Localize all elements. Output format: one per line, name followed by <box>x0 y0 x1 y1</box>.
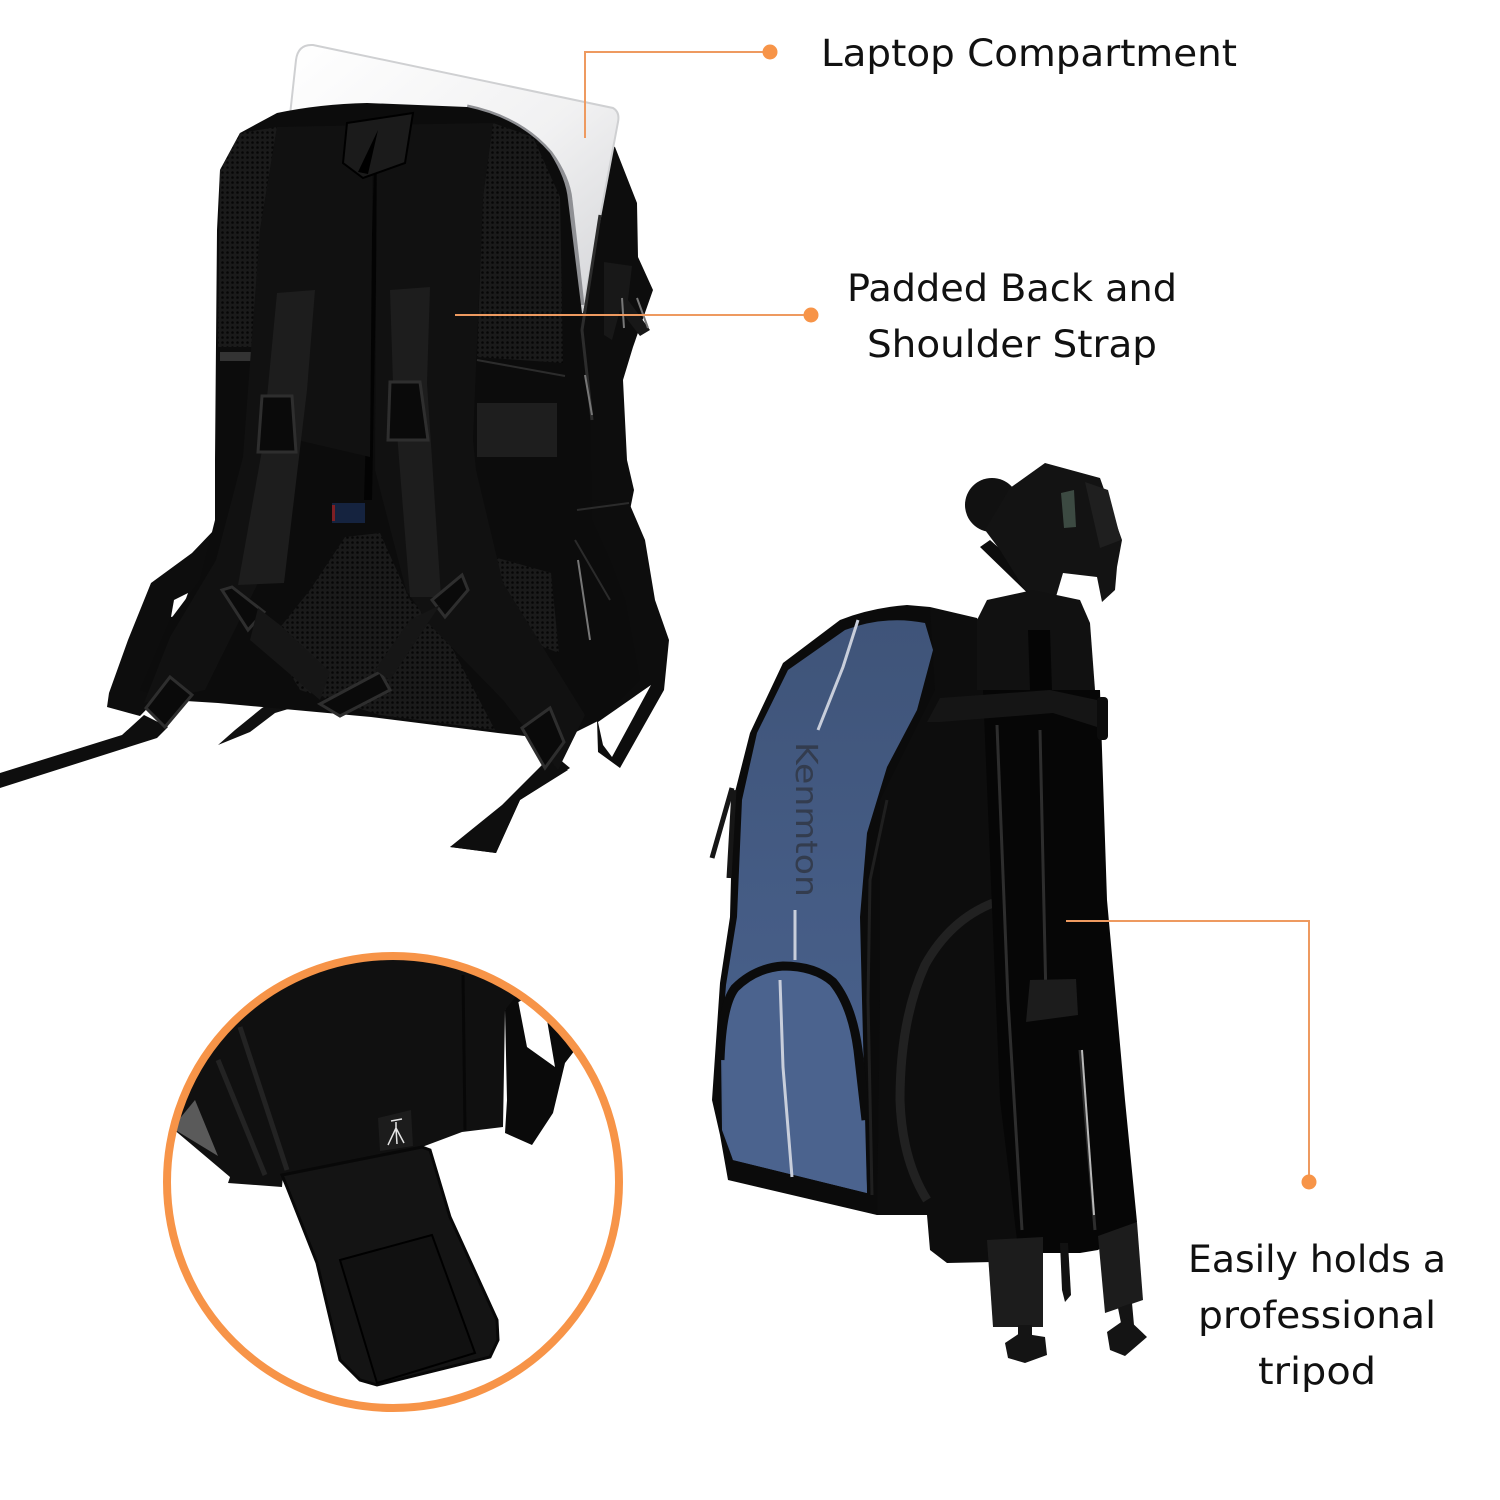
black side panel <box>850 607 1040 1263</box>
right pocket and loop strap <box>560 500 669 768</box>
top handle <box>343 113 413 178</box>
knob <box>965 478 1019 532</box>
callout: padded back: Shoulder Strap <box>867 323 1157 366</box>
callout: padded back: Padded Back and <box>847 267 1177 310</box>
tripod <box>927 463 1147 1363</box>
head plate <box>1085 482 1121 548</box>
reflective lines <box>780 620 858 1177</box>
zipper and pulls <box>578 215 650 640</box>
centre seam <box>364 170 378 500</box>
side panel behind laptop <box>560 140 653 600</box>
tripod tag <box>378 1110 413 1151</box>
strap tail right <box>450 728 570 853</box>
velcro pocket <box>340 1235 475 1383</box>
tripod silhouette <box>983 690 1137 1253</box>
spirit level <box>1061 490 1076 528</box>
spike <box>1060 1243 1071 1302</box>
bag outer rim <box>712 605 935 1215</box>
side strap <box>505 995 575 1145</box>
upper mesh right <box>477 123 563 363</box>
callout: tripod: tripod <box>1258 1350 1376 1393</box>
callout: padded back <box>455 267 1177 366</box>
laptop <box>290 45 618 313</box>
grey bag wedge <box>177 1100 218 1156</box>
leg lock <box>1026 979 1078 1022</box>
blue front panel <box>721 620 933 1193</box>
circular detail: strap closeup <box>167 940 619 1408</box>
left shoulder pad <box>144 125 373 703</box>
pocket seam <box>575 503 629 600</box>
small hip tab <box>218 688 318 745</box>
left loop strap <box>107 530 216 716</box>
white glint <box>1082 1050 1094 1215</box>
callout: laptop compartment <box>585 32 1237 138</box>
callout: laptop compartment: Laptop Compartment <box>821 32 1237 75</box>
strap knob <box>1097 697 1108 740</box>
backpack back view with laptop <box>0 45 669 853</box>
side pocket zipper <box>900 903 993 1200</box>
zipper pulls <box>712 788 734 878</box>
right loop gap <box>598 685 651 757</box>
strap buckles <box>146 382 564 768</box>
collar <box>977 590 1095 690</box>
callout: tripod: professional <box>1198 1294 1436 1337</box>
leg highlights <box>997 725 1095 1230</box>
folded strap <box>282 1147 498 1385</box>
callout: tripod <box>1066 921 1446 1393</box>
head <box>985 463 1122 602</box>
side pocket trim and velcro <box>220 352 252 361</box>
feet <box>1005 1318 1147 1363</box>
front pocket <box>720 966 867 1193</box>
right shoulder pad <box>375 123 585 770</box>
left webbing <box>238 290 315 585</box>
callout: tripod: Easily holds a <box>1188 1238 1446 1281</box>
pan handle <box>980 540 1058 612</box>
lower mesh <box>270 533 495 730</box>
right webbing <box>390 287 441 597</box>
main bag body <box>140 103 640 740</box>
bag base <box>176 960 521 1187</box>
foot stems <box>1018 1303 1134 1340</box>
blue backpack with tripod <box>712 605 1040 1263</box>
strap <box>927 690 1097 727</box>
right leg clamps <box>1098 1222 1143 1313</box>
stitched seams <box>218 1027 287 1175</box>
strap tail left <box>0 715 168 788</box>
left leg clamps <box>987 1237 1043 1327</box>
brand: Kenmton <box>788 742 823 897</box>
brand label <box>332 503 365 523</box>
upper mesh left <box>218 127 277 347</box>
strap webbing tails to buckles <box>250 605 440 700</box>
panel seam <box>868 800 887 1195</box>
laptop shadow along bag edge <box>467 107 582 305</box>
